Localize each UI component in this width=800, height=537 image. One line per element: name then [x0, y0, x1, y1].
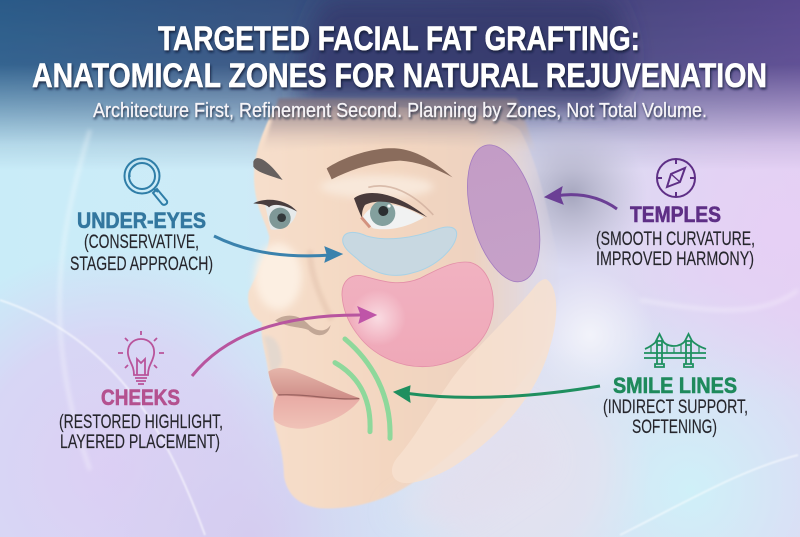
label: temples: IMPROVED HARMONY)	[596, 249, 754, 270]
label: under-eyes: STAGED APPROACH)	[70, 254, 213, 275]
face portrait	[248, 98, 560, 523]
label: under-eyes	[70, 158, 213, 275]
cheek zone	[342, 262, 493, 367]
nostril	[275, 316, 331, 335]
left brow	[253, 158, 283, 180]
arrow: smile lines	[394, 386, 600, 402]
label: under-eyes: (CONSERVATIVE,	[84, 232, 199, 253]
arrow: cheeks	[192, 307, 376, 376]
icon: bridge	[644, 334, 706, 367]
subtitle: Architecture First, Refinement Second. Planning by Zones, Not Total Volume.	[93, 100, 707, 122]
right eye	[354, 186, 433, 229]
label: temples	[596, 159, 755, 270]
cheek highlight	[350, 290, 406, 346]
label: smile lines	[603, 334, 748, 438]
label: cheeks: CHEEKS	[101, 385, 180, 410]
icon: light bulb	[118, 331, 164, 384]
smile lines zone	[335, 339, 390, 438]
title: TARGETED FACIAL FAT GRAFTING:	[158, 20, 640, 58]
icon: magnifying glass	[124, 158, 167, 205]
title	[32, 20, 767, 95]
philtrum shadow	[263, 336, 282, 377]
label: cheeks	[59, 331, 223, 453]
under-eye zone	[343, 227, 457, 275]
cheek glow	[255, 243, 302, 310]
forehead fade	[262, 98, 537, 153]
jaw zone	[392, 279, 556, 483]
icon: compass	[657, 159, 695, 197]
temple zone	[454, 137, 553, 290]
right brow	[327, 148, 453, 179]
arrow: temples	[545, 187, 617, 209]
nose shading	[310, 250, 332, 320]
label: cheeks: (RESTORED HIGHLIGHT,	[59, 412, 223, 433]
label: cheeks: LAYERED PLACEMENT)	[60, 432, 220, 453]
left eye	[253, 200, 297, 230]
face shape	[248, 106, 560, 509]
label: smile lines: SOFTENING)	[632, 417, 717, 438]
label: temples: TEMPLES	[630, 202, 721, 227]
lower jaw haze	[387, 407, 553, 523]
label: smile lines: (INDIRECT SUPPORT,	[603, 397, 748, 418]
hair silhouette	[299, 0, 627, 105]
label: smile lines: SMILE LINES	[613, 373, 737, 398]
label: under-eyes: UNDER-EYES	[77, 208, 206, 233]
arrow: under-eyes	[214, 236, 342, 262]
lips	[268, 368, 360, 429]
